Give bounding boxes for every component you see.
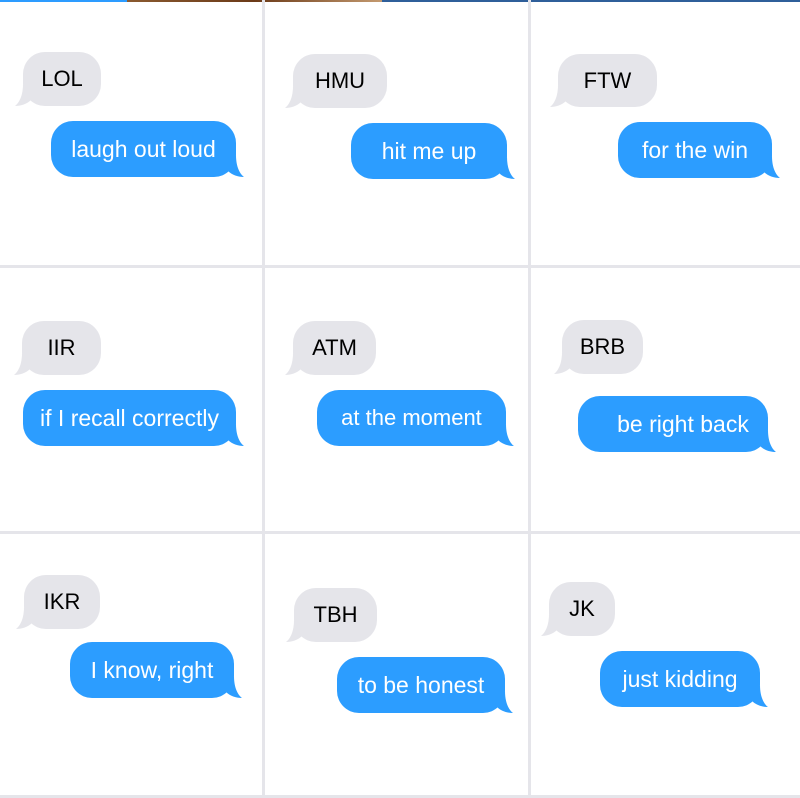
- bubble: at the moment: at the moment: [341, 405, 482, 430]
- panel: HMU: [285, 54, 515, 179]
- bubble: for the win: [618, 122, 772, 178]
- panel: JK: [541, 582, 768, 707]
- bubble: IIR: [22, 321, 101, 375]
- bubble: laugh out loud: [51, 121, 236, 177]
- bubble: TBH: TBH: [314, 602, 358, 627]
- bubble: IIR: IIR: [47, 335, 76, 360]
- bubble: be right back: be right back: [617, 410, 749, 436]
- top color strip: [0, 0, 800, 2]
- panel: FTW: [550, 54, 780, 178]
- bubble: be right back: [578, 396, 768, 452]
- bubble: IKR: IKR: [44, 589, 80, 614]
- bubble: ATM: ATM: [312, 335, 357, 360]
- bubble: hit me up: hit me up: [382, 138, 476, 164]
- bubble: IKR: [24, 575, 100, 629]
- bubble: just kidding: just kidding: [622, 666, 738, 692]
- bubble: FTW: [558, 54, 657, 107]
- bubble: BRB: BRB: [580, 334, 625, 359]
- panel: IKR: [16, 575, 242, 698]
- bubble: to be honest: to be honest: [358, 672, 484, 698]
- panel: ATM: [285, 321, 514, 446]
- panel: BRB: [554, 320, 776, 452]
- bubble: for the win: for the win: [642, 136, 748, 162]
- bubble: laugh out loud: laugh out loud: [71, 136, 216, 162]
- bubble: if I recall correctly: if I recall correctly: [40, 404, 219, 430]
- bubble: I know, right: [70, 642, 234, 698]
- bubble: at the moment: [317, 390, 506, 446]
- bubble: LOL: [23, 52, 101, 106]
- bubble: I know, right: I know, right: [91, 656, 213, 682]
- panel: IIR: [14, 321, 244, 446]
- panel: LOL: [15, 52, 244, 177]
- bubble: TBH: [294, 588, 377, 642]
- bubble: LOL: LOL: [41, 66, 83, 91]
- panel: TBH: [286, 588, 513, 713]
- bubble: ATM: [293, 321, 376, 375]
- bubble: to be honest: [337, 657, 505, 713]
- bubble: HMU: [293, 54, 387, 108]
- bubble: just kidding: [600, 651, 760, 707]
- bubble: JK: JK: [569, 596, 595, 621]
- bubble: if I recall correctly: [23, 390, 236, 446]
- bubble: hit me up: [351, 123, 507, 179]
- bubble: JK: [549, 582, 615, 636]
- bubble: FTW: FTW: [584, 68, 631, 92]
- bubble: HMU: HMU: [315, 68, 365, 93]
- bubble: BRB: [562, 320, 643, 374]
